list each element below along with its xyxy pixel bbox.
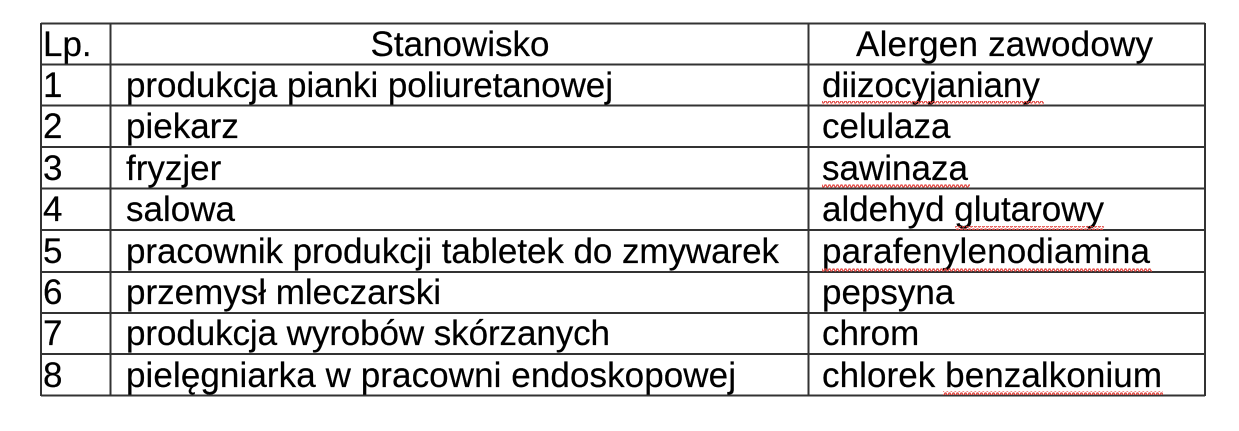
row 1: produkcja pianki poliuretanowej xyxy=(126,66,613,105)
row 2: piekarz xyxy=(126,107,239,146)
row 1 xyxy=(43,66,1044,105)
header row: Alergen zawodowy xyxy=(856,25,1154,64)
row 2 xyxy=(43,107,951,146)
row 8: 8 xyxy=(43,356,62,395)
row 1: diizocyjaniany xyxy=(822,66,1040,105)
row 5: 5 xyxy=(43,232,62,271)
row 4: salowa xyxy=(126,190,235,229)
row 5: pracownik produkcji tabletek do zmywarek xyxy=(126,232,780,271)
row 5: parafenylenodiamina xyxy=(822,232,1151,271)
row 3 xyxy=(43,149,970,188)
row 2: celulaza xyxy=(822,107,951,146)
row 6: pepsyna xyxy=(822,273,955,312)
header row: Stanowisko xyxy=(371,25,549,64)
row 3: fryzjer xyxy=(126,149,222,188)
row 8: chlorek benzalkonium xyxy=(822,356,1162,395)
row 4: 4 xyxy=(43,190,62,229)
row 8 xyxy=(43,356,1163,395)
row 6 xyxy=(43,273,955,312)
header row: Lp. xyxy=(43,25,92,64)
row 7 xyxy=(43,314,919,353)
row 6: przemysł mleczarski xyxy=(126,273,441,312)
row 4 xyxy=(43,190,1104,230)
row 8: pielęgniarka w pracowni endoskopowej xyxy=(126,356,736,395)
row 7: 7 xyxy=(43,314,62,353)
row 5 xyxy=(43,232,1152,272)
row 2: 2 xyxy=(43,107,62,146)
row 1: 1 xyxy=(43,66,62,105)
row 7: chrom xyxy=(822,314,919,353)
row 7: produkcja wyrobów skórzanych xyxy=(126,314,610,353)
row 6: 6 xyxy=(43,273,62,312)
row 4: aldehyd glutarowy xyxy=(822,190,1104,229)
row 3: 3 xyxy=(43,149,62,188)
header row xyxy=(43,25,1154,64)
row 3: sawinaza xyxy=(822,149,968,188)
